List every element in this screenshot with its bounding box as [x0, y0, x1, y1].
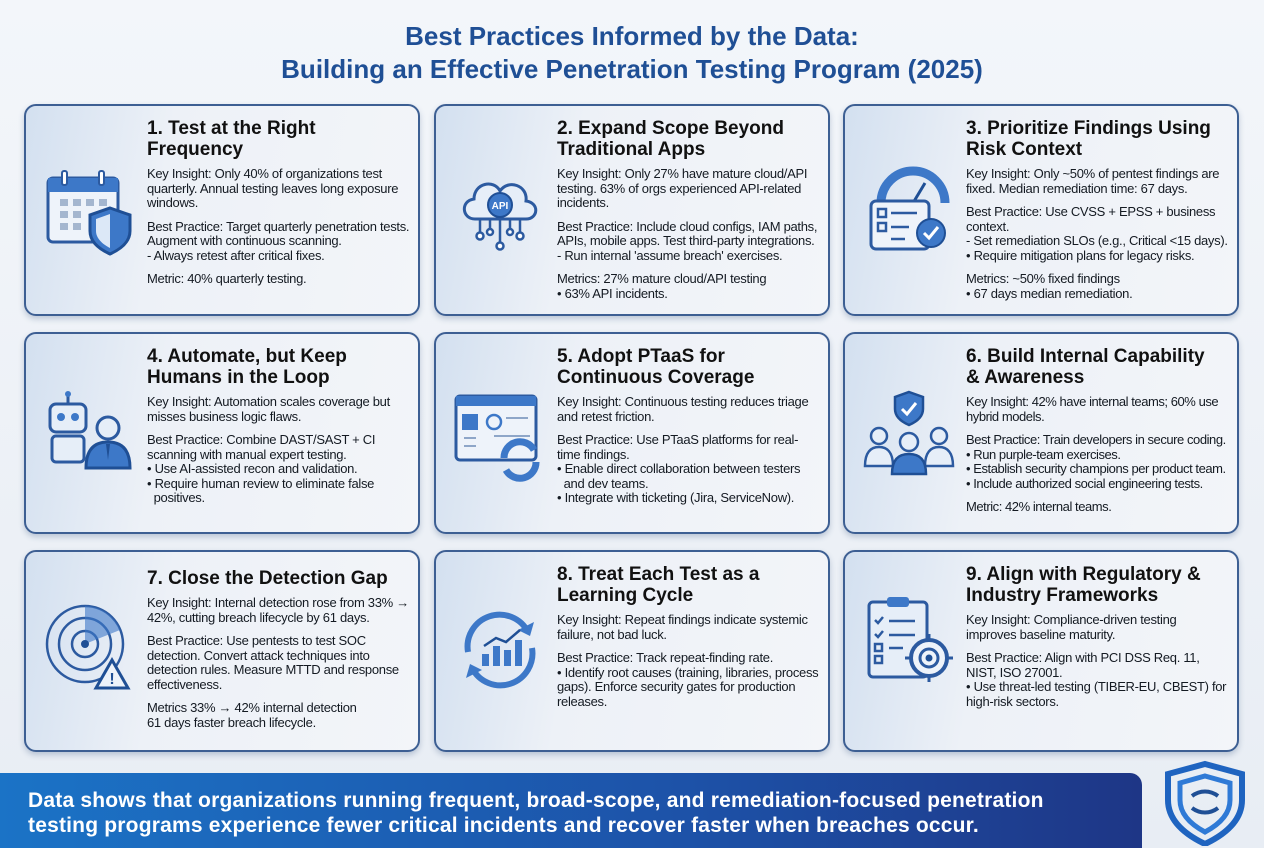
icon: cloud API: [462, 182, 538, 251]
text block: Industry Frameworks: [966, 585, 1158, 606]
text block: [147, 346, 390, 505]
text block: 61 days faster breach lifecycle.: [147, 714, 316, 730]
text block: [557, 118, 817, 300]
banner: conclusion: testing programs experience fewer critical incidents and recover faster when breaches occur.: [28, 814, 979, 837]
text block: Continuous Coverage: [557, 367, 754, 388]
text block: Frequency: [147, 139, 243, 160]
title: Best Practices Informed by the Data:: [405, 21, 859, 51]
text block: • Integrate with ticketing (Jira, ServiceNow).: [557, 490, 794, 505]
text block: • 63% API incidents.: [557, 286, 668, 300]
text block: • Use threat-led testing (TIBER-EU, CBEST) for high-risk sectors.: [966, 679, 1226, 708]
text block: [147, 118, 409, 286]
title: Building an Effective Penetration Testing Program (2025): [281, 54, 983, 84]
text block: Key Insight: Repeat findings indicate systemic failure, not bad luck.: [557, 612, 808, 642]
text block: • Identify root causes (training, libraries, process gaps). Enforce security gates for production releases.: [557, 664, 818, 708]
text block: 7. Close the Detection Gap: [147, 568, 388, 589]
text block: Metrics 33% → 42% internal detection: [147, 700, 357, 715]
text block: & Awareness: [966, 367, 1084, 388]
text block: Best Practice: Use pentests to test SOC detection. Convert attack techniques into detection rules. Measure MTTD and response effectiveness.: [147, 633, 399, 692]
banner: conclusion: Data shows that organizations running frequent, broad-scope, and remediation-focused penetration: [28, 789, 1044, 812]
text block: - Always retest after critical fixes.: [147, 248, 324, 262]
icon: gauge checklist: [870, 166, 950, 250]
panel: 8 learning cycle: [434, 550, 830, 752]
icon: radar warning: [46, 604, 130, 690]
icon: clipboard target: [868, 597, 953, 682]
text block: • Require human review to eliminate false: [147, 476, 374, 490]
text block: • Establish security champions per product team.: [966, 461, 1226, 476]
text block: [966, 118, 1228, 300]
panel: 9 frameworks: [843, 550, 1239, 752]
text block: Best Practice: Use PTaaS platforms for real-time findings.: [557, 432, 798, 462]
text block: Best Practice: Include cloud configs, IAM paths, APIs, mobile apps. Test third-party integrations.: [557, 218, 817, 248]
panel: 6 internal capability: [843, 332, 1239, 534]
panel: 7 detection gap: [24, 550, 420, 752]
text block: • Use AI-assisted recon and validation.: [147, 461, 357, 476]
text block: 3. Prioritize Findings Using: [966, 118, 1211, 139]
icon: browser refresh: [454, 394, 540, 482]
text block: Risk Context: [966, 139, 1082, 160]
icon: cycle chart: [464, 612, 536, 688]
panel: 1 frequency: [24, 104, 420, 316]
text block: [557, 564, 818, 708]
text block: Key Insight: Only 27% have mature cloud/API testing. 63% of orgs experienced API-related incidents.: [557, 166, 807, 210]
text block: • Include authorized social engineering tests.: [966, 476, 1203, 490]
title: [281, 21, 983, 84]
text block: Metric: 42% internal teams.: [966, 499, 1111, 514]
text block: Best Practice: Target quarterly penetration tests. Augment with continuous scanning.: [147, 218, 409, 248]
text block: and dev teams.: [564, 476, 648, 490]
text block: positives.: [154, 490, 205, 505]
text block: Learning Cycle: [557, 585, 693, 606]
text block: Traditional Apps: [557, 139, 705, 160]
text block: • Enable direct collaboration between testers: [557, 461, 800, 476]
icon: radar warning: !: [109, 671, 115, 688]
text block: Metric: 40% quarterly testing.: [147, 271, 306, 286]
text block: Key Insight: 42% have internal teams; 60% use hybrid models.: [966, 394, 1218, 424]
panel: 2 scope: [434, 104, 830, 316]
text block: Metrics: 27% mature cloud/API testing: [557, 271, 766, 286]
text block: Key Insight: Continuous testing reduces triage and retest friction.: [557, 394, 808, 424]
text block: Humans in the Loop: [147, 367, 330, 388]
panel: 4 automate: [24, 332, 420, 534]
text block: Best Practice: Combine DAST/SAST + CI scanning with manual expert testing.: [147, 432, 375, 462]
text block: 8. Treat Each Test as a: [557, 564, 759, 585]
text block: • Run purple-team exercises.: [966, 446, 1121, 462]
text block: 5. Adopt PTaaS for: [557, 346, 725, 367]
panel: 5 PTaaS: [434, 332, 830, 534]
text block: 9. Align with Regulatory &: [966, 564, 1201, 585]
text block: 1. Test at the Right: [147, 118, 316, 139]
text block: [557, 346, 808, 505]
text block: 2. Expand Scope Beyond: [557, 118, 784, 139]
icon: robot and human: [48, 391, 132, 470]
text block: Key Insight: Only 40% of organizations test quarterly. Annual testing leaves long exposure windows.: [147, 166, 398, 210]
banner: conclusion: [0, 773, 1142, 848]
panel: 3 prioritize: [843, 104, 1239, 316]
text block: [966, 564, 1226, 708]
icon: team shield: [864, 390, 954, 476]
text block: 6. Build Internal Capability: [966, 346, 1205, 367]
text block: Best Practice: Align with PCI DSS Req. 11, NIST, ISO 27001.: [966, 650, 1200, 680]
icon: calendar shield: [46, 170, 132, 256]
text block: Best Practice: Track repeat-finding rate.: [557, 650, 773, 665]
text block: [147, 568, 409, 730]
text block: Key Insight: Only ~50% of pentest findings are fixed. Median remediation time: 67 days.: [966, 166, 1219, 196]
text block: - Set remediation SLOs (e.g., Critical <15 days).: [966, 233, 1228, 248]
text block: Metrics: ~50% fixed findings: [966, 271, 1120, 286]
icon: cloud API: API: [492, 201, 509, 212]
text block: [966, 346, 1226, 514]
text block: • 67 days median remediation.: [966, 286, 1132, 300]
text block: Best Practice: Use CVSS + EPSS + business context.: [966, 204, 1215, 234]
icon: shield logo: [1165, 760, 1245, 846]
text block: Key Insight: Automation scales coverage but misses business logic flaws.: [147, 394, 390, 424]
text block: Key Insight: Internal detection rose from 33% → 42%, cutting breach lifecycle by 61 days.: [147, 595, 409, 624]
text block: • Require mitigation plans for legacy risks.: [966, 248, 1194, 262]
text block: Best Practice: Train developers in secure coding.: [966, 432, 1226, 447]
text block: - Run internal 'assume breach' exercises.: [557, 248, 782, 262]
text block: 4. Automate, but Keep: [147, 346, 347, 367]
text block: Key Insight: Compliance-driven testing improves baseline maturity.: [966, 612, 1176, 642]
